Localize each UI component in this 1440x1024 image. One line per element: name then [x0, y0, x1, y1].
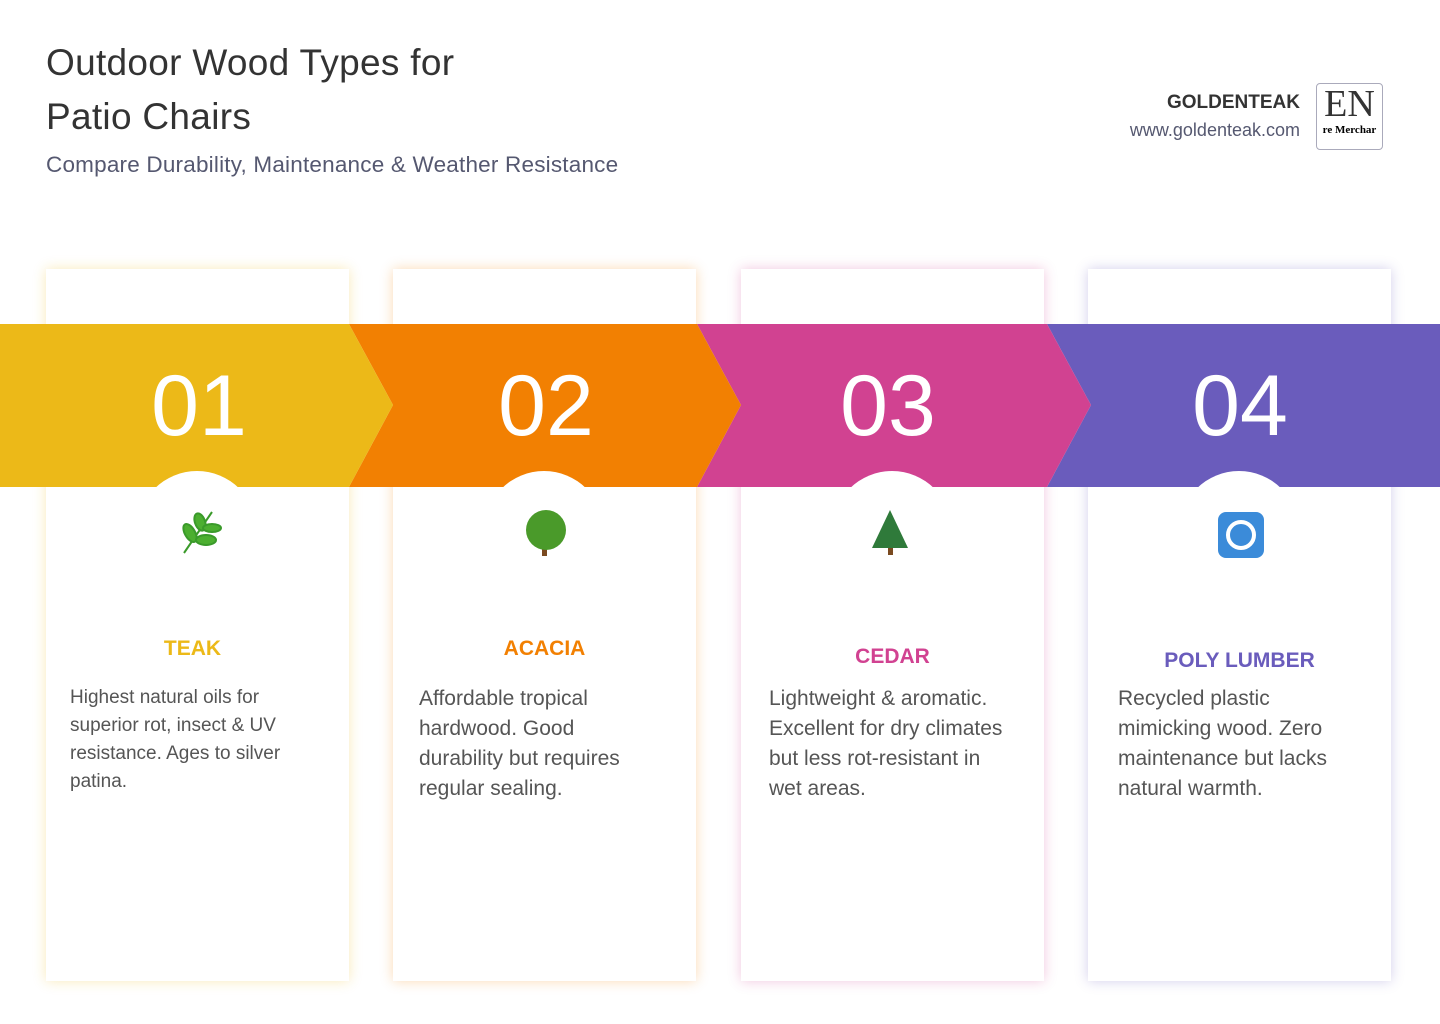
icon: pine	[872, 510, 908, 555]
logo: re Merchar	[1323, 124, 1376, 136]
acacia text: regular sealing.	[419, 777, 563, 800]
acacia title: ACACIA	[504, 637, 585, 660]
teak text: superior rot, insect & UV	[70, 715, 276, 736]
acacia text	[419, 687, 620, 800]
poly text: natural warmth.	[1118, 777, 1263, 800]
poly text: Recycled plastic	[1118, 687, 1270, 710]
arrow band: 01	[151, 358, 247, 454]
brand url: www.goldenteak.com	[1130, 120, 1300, 140]
card 1	[46, 269, 349, 981]
title	[46, 42, 454, 137]
acacia text: durability but requires	[419, 747, 620, 770]
poly text: mimicking wood. Zero	[1118, 717, 1322, 740]
logo	[1316, 83, 1383, 150]
cedar text: but less rot-resistant in	[769, 747, 980, 770]
teak title: TEAK	[164, 637, 221, 660]
teak text	[70, 687, 280, 792]
poly text	[1118, 687, 1327, 800]
card 3	[741, 269, 1044, 981]
icon: cycle	[1218, 512, 1264, 558]
teak text: resistance. Ages to silver	[70, 743, 280, 764]
title: Outdoor Wood Types for	[46, 42, 454, 83]
acacia text: Affordable tropical	[419, 687, 588, 710]
cedar text: wet areas.	[769, 777, 866, 800]
poly title: POLY LUMBER	[1164, 649, 1315, 672]
arrow band: 03	[840, 358, 936, 454]
brand name: GOLDENTEAK	[1167, 92, 1300, 113]
icon: tree	[526, 510, 566, 556]
subtitle: Compare Durability, Maintenance & Weather Resistance	[46, 152, 618, 177]
brand block	[1130, 83, 1383, 150]
title: Patio Chairs	[46, 96, 251, 137]
poly text: maintenance but lacks	[1118, 747, 1327, 770]
logo: EN	[1324, 83, 1375, 125]
cedar text	[769, 687, 1002, 800]
teak text: patina.	[70, 771, 127, 792]
cedar title: CEDAR	[855, 645, 930, 668]
arrow band: 02	[498, 358, 594, 454]
card 2	[393, 269, 696, 981]
cedar text: Excellent for dry climates	[769, 717, 1002, 740]
cedar text: Lightweight & aromatic.	[769, 687, 987, 710]
icon: leaf	[181, 512, 221, 553]
arrow band: 04	[1192, 358, 1288, 454]
card 4	[1088, 269, 1391, 981]
acacia text: hardwood. Good	[419, 717, 574, 740]
teak text: Highest natural oils for	[70, 687, 259, 708]
